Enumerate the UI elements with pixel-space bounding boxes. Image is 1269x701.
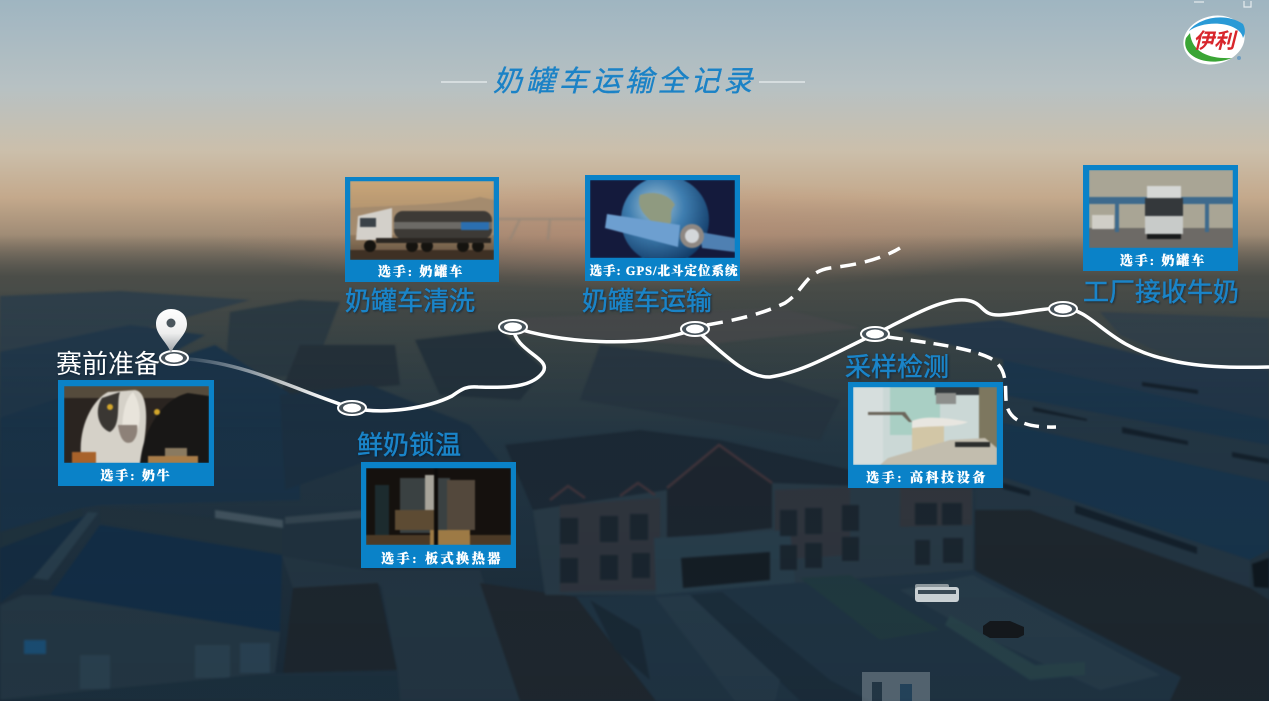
photo: plant interior — [366, 468, 511, 545]
photo: lab robot — [853, 387, 997, 465]
panel: tanker truck — [345, 177, 499, 282]
caption: 选手: 高科技设备 — [866, 470, 988, 485]
caption: 选手: 奶牛 — [100, 468, 172, 483]
photo: truck at gate — [1089, 170, 1233, 248]
right long roofs — [900, 320, 1269, 420]
bottom centre ground — [282, 556, 400, 588]
icon: location pin — [156, 309, 187, 353]
security booths — [862, 672, 930, 701]
caption: 选手: 奶罐车 — [1120, 253, 1206, 268]
label: tanker transport: 奶罐车运输 — [582, 286, 712, 316]
main building roof — [505, 430, 850, 510]
facade — [533, 483, 973, 595]
caption: 选手: GPS/北斗定位系统 — [589, 263, 739, 278]
photo: cows — [64, 386, 209, 463]
route: lower dashed branch — [888, 337, 1056, 427]
node: fresh milk — [338, 401, 366, 415]
panel: GPS satellite — [585, 175, 740, 281]
title: 奶罐车运输全记录 — [493, 66, 756, 98]
logo: Yili: 伊利 — [1193, 30, 1238, 53]
left far roofs — [0, 291, 250, 352]
window control icons — [1194, 1, 1251, 7]
label: fresh milk temperature lock: 鲜奶锁温 — [357, 430, 461, 460]
label: pre-race preparation: 赛前准备 — [56, 349, 160, 379]
route: upper dashed branch — [707, 248, 900, 325]
panel: sampling equipment — [848, 382, 1003, 488]
parked bus — [915, 584, 959, 602]
panel: cows — [58, 380, 214, 486]
label: factory receives milk: 工厂接收牛奶 — [1083, 277, 1239, 307]
plaza — [576, 570, 1181, 701]
caption: 选手: 板式换热器 — [381, 551, 503, 567]
photo: earth and satellite — [590, 180, 735, 258]
left large roofs — [0, 345, 300, 532]
parked car — [983, 621, 1024, 638]
node: transport — [681, 322, 709, 336]
node: factory — [1049, 302, 1077, 316]
logo: Yili — [1178, 9, 1250, 71]
route: main solid path — [188, 300, 1269, 411]
caption: 选手: 奶罐车 — [378, 264, 464, 279]
panel: factory gate — [1083, 165, 1238, 271]
photo: tanker truck — [350, 181, 494, 260]
label: sampling inspection: 采样检测 — [845, 352, 949, 382]
node: tanker wash — [499, 320, 527, 334]
far bridge — [494, 219, 735, 240]
label: tanker wash: 奶罐车清洗 — [345, 286, 475, 316]
node: sampling — [861, 327, 889, 341]
node: start — [160, 351, 188, 365]
panel: plate heat exchanger — [361, 462, 516, 568]
porch — [654, 530, 795, 595]
